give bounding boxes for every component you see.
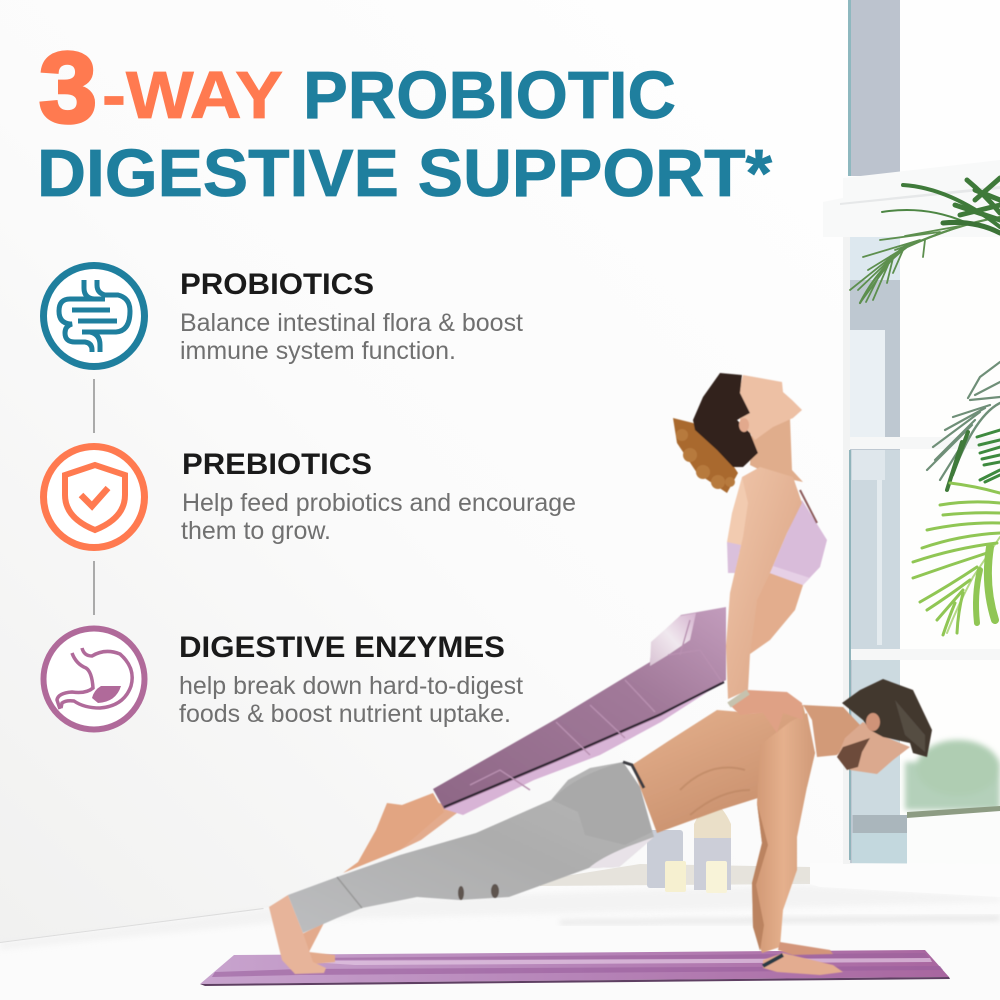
back foot xyxy=(300,923,335,964)
panel: prebiotics xyxy=(181,448,576,545)
connector line xyxy=(93,379,95,433)
arm xyxy=(726,467,802,699)
bright lower frond xyxy=(913,483,1000,635)
yoga mat xyxy=(200,950,950,986)
crossbars xyxy=(845,437,1000,449)
title xyxy=(37,32,773,211)
lower window pane xyxy=(850,237,1000,864)
bra xyxy=(770,500,827,585)
grey-green middle frond xyxy=(927,362,1000,490)
bracelet xyxy=(729,692,748,705)
dark upper frond xyxy=(850,178,1000,303)
panel: prebiotics: PREBIOTICS xyxy=(182,448,372,481)
title: -WAY xyxy=(102,58,283,133)
grey trousers xyxy=(288,762,654,933)
baseboard xyxy=(540,864,810,886)
neck xyxy=(750,418,803,482)
hip highlight xyxy=(650,613,696,666)
connector line xyxy=(93,561,95,615)
window xyxy=(810,0,1000,897)
panel: digestive enzymes xyxy=(179,631,523,728)
second small frond xyxy=(977,430,1000,482)
hands on mat xyxy=(778,942,833,955)
calves and feet xyxy=(385,800,461,850)
outdoor ground xyxy=(907,808,1000,864)
legging light strip xyxy=(444,680,726,815)
curly hair xyxy=(673,418,738,493)
icon: shield with check xyxy=(44,446,144,548)
panel: digestive enzymes: help break down hard-to-digest xyxy=(179,672,523,700)
ear xyxy=(866,713,880,731)
face xyxy=(738,375,802,440)
panel: probiotics xyxy=(180,268,523,365)
title: 3 xyxy=(39,32,97,144)
leggings xyxy=(433,607,726,809)
panel: probiotics: Balance intestinal flora & boost xyxy=(180,309,523,337)
hand on back xyxy=(728,690,803,733)
dark hair xyxy=(693,373,758,467)
ear xyxy=(739,418,749,432)
floor xyxy=(0,867,1000,1000)
panel: prebiotics: them to grow. xyxy=(181,517,331,545)
supporting arm xyxy=(752,713,815,953)
man in plank xyxy=(269,679,932,975)
bra strap xyxy=(800,490,817,523)
woman in upward pose xyxy=(343,373,827,873)
beard xyxy=(837,738,870,770)
title: DIGESTIVE SUPPORT* xyxy=(37,136,773,211)
title: PROBIOTIC xyxy=(303,58,676,133)
icon: intestine xyxy=(44,266,144,366)
vases and candles xyxy=(647,809,731,893)
torso xyxy=(632,705,815,833)
garden bush xyxy=(905,740,1000,810)
panel: digestive enzymes: foods & boost nutrient uptake. xyxy=(179,700,511,728)
panel: digestive enzymes: DIGESTIVE ENZYMES xyxy=(179,631,505,664)
neck xyxy=(803,705,860,757)
panel: prebiotics: Help feed probiotics and encourage xyxy=(182,489,576,517)
window frame ledge xyxy=(823,160,1000,237)
torso back and midriff xyxy=(727,477,755,552)
upper window pane xyxy=(848,0,1000,176)
face xyxy=(837,722,910,774)
panel: probiotics: PROBIOTICS xyxy=(180,268,374,301)
window sill xyxy=(810,863,1000,897)
panel: probiotics: immune system function. xyxy=(180,337,456,365)
palm plant leaves xyxy=(850,178,1000,635)
hair xyxy=(842,679,932,757)
icon: stomach xyxy=(44,628,144,730)
